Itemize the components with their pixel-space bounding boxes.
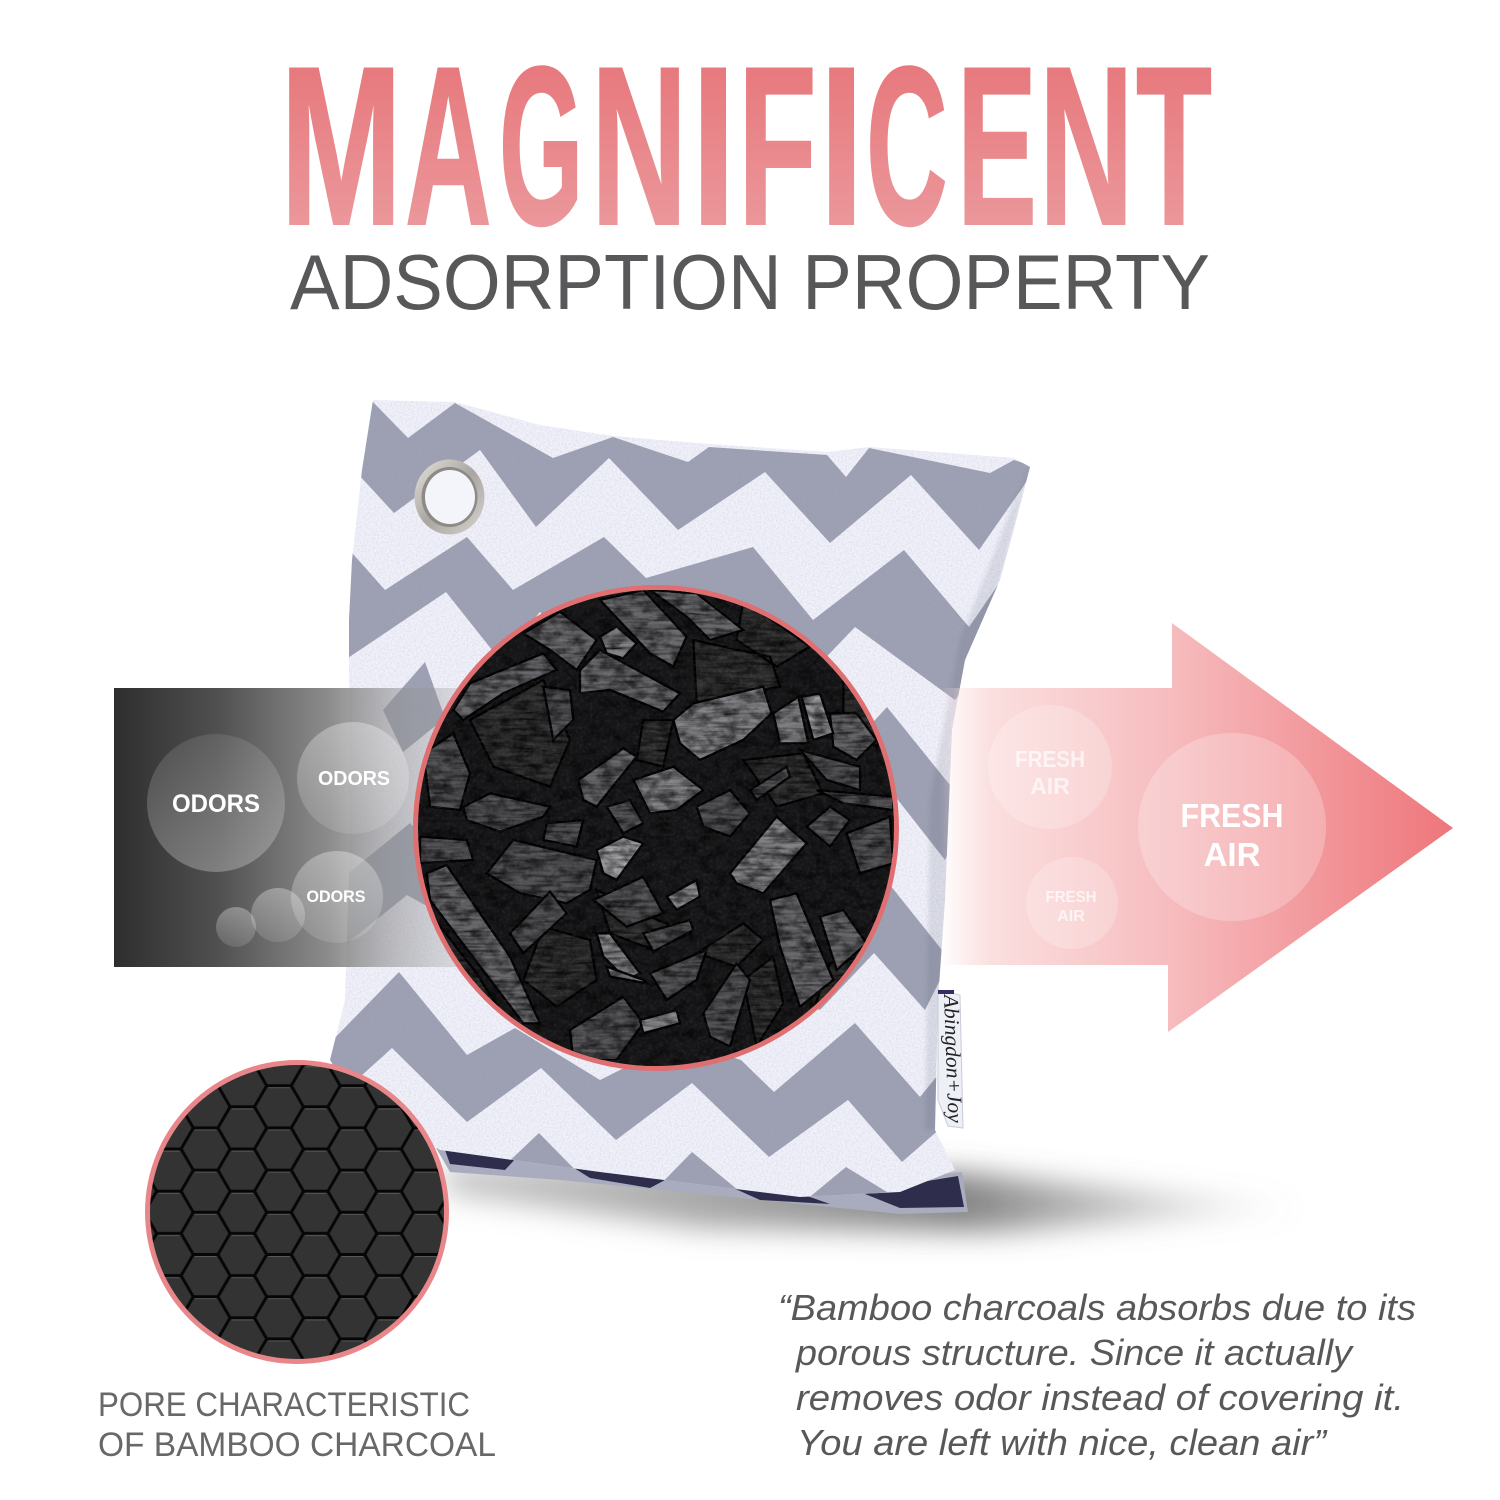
fresh air bubble lower [1026, 857, 1118, 949]
odor bubble large [147, 734, 285, 872]
fresh air bubble large: AIR [1204, 836, 1261, 873]
quote text: “Bamboo charcoals absorbs due to its [778, 1287, 1416, 1328]
title: MAGNIFICENT [280, 19, 1212, 273]
chevron stripes [325, 402, 1035, 1205]
fresh air bubble upper: AIR [1030, 773, 1070, 799]
filler chunks [430, 600, 893, 1047]
title: MAGNIFICENT: N [1039, 21, 1134, 273]
brand tag: Abingdon+Joy [939, 992, 967, 1124]
quote text: porous structure. Since it actually [795, 1332, 1354, 1373]
cloth weave texture [320, 390, 1050, 1220]
caption: pore characteristic [98, 1386, 496, 1464]
odor bubble small: ODORS [306, 888, 366, 906]
soft fold shading [925, 467, 1030, 1130]
fresh air bubble large [1138, 733, 1326, 921]
title: MAGNIFICENT: T [1136, 20, 1212, 272]
fresh air bubble upper [988, 705, 1112, 829]
title: MAGNIFICENT: N [591, 21, 687, 273]
caption: pore characteristic: OF BAMBOO CHARCOAL [98, 1426, 496, 1464]
tiny odor bubbles [216, 888, 305, 947]
quote text: removes odor instead of covering it. [796, 1377, 1404, 1418]
title: MAGNIFICENT: F [738, 19, 817, 272]
odor bubble large: ODORS [172, 790, 260, 818]
fresh air bubble lower: FRESH [1046, 889, 1096, 906]
odor bubble medium: ODORS [318, 768, 390, 790]
title: MAGNIFICENT: A [405, 20, 492, 273]
panel: odors gradient [114, 688, 462, 967]
odor bubble medium [297, 722, 409, 834]
caption: pore characteristic: PORE CHARACTERISTIC [98, 1386, 470, 1424]
product: chevron charcoal bag [320, 390, 1050, 1220]
title: MAGNIFICENT: M [280, 20, 402, 273]
title: MAGNIFICENT: I [691, 20, 736, 272]
pore hexagon circle [145, 1060, 449, 1364]
subtitle: adsorption property: ADSORPTION PROPERTY [290, 238, 1210, 326]
quote text [778, 1287, 1416, 1463]
fresh air bubble upper: FRESH [1015, 746, 1085, 772]
charcoal circle [410, 580, 900, 1071]
title: MAGNIFICENT: C [866, 19, 948, 272]
arrow: fresh air [940, 623, 1453, 1032]
icon: metal grommet [414, 460, 484, 534]
fresh air bubble large: FRESH [1180, 797, 1284, 834]
title: MAGNIFICENT: I [819, 20, 864, 272]
odor bubble small [291, 851, 383, 943]
quote text: You are left with nice, clean air” [797, 1422, 1328, 1463]
bag bottom seam [436, 1148, 968, 1214]
title: MAGNIFICENT: G [499, 20, 583, 272]
title: MAGNIFICENT: E [957, 20, 1037, 273]
fresh air bubble lower: AIR [1057, 908, 1085, 925]
ground shadow beneath bag [440, 1165, 1310, 1232]
